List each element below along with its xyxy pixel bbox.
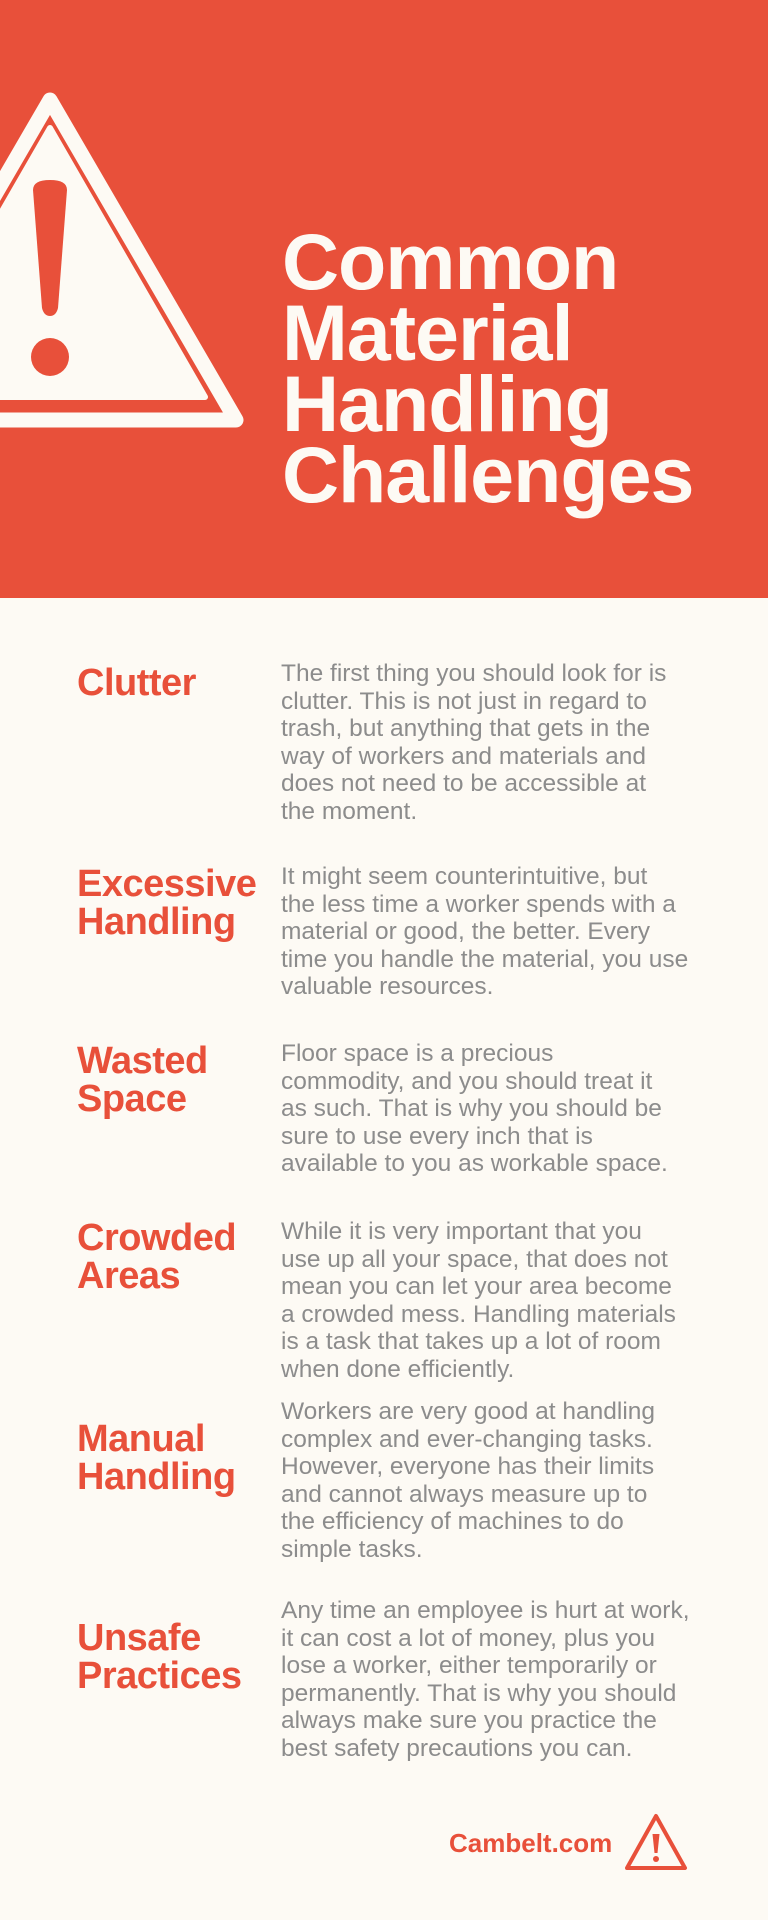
text: Clutter: The first thing you should look for is <box>281 660 666 687</box>
heading: Unsafe Practices: Practices <box>77 1655 242 1697</box>
heading: Wasted Space: Wasted <box>77 1040 208 1082</box>
text: Unsafe Practices: permanently. That is why you should <box>281 1680 676 1706</box>
text: Crowded Areas: mean you can let your area become <box>281 1273 672 1300</box>
heading: Clutter: Clutter <box>77 662 196 704</box>
text: Crowded Areas: a crowded mess. Handling materials <box>281 1300 676 1328</box>
text: Crowded Areas: use up all your space, that does not <box>281 1246 668 1272</box>
text: Unsafe Practices: always make sure you practice the <box>281 1707 657 1734</box>
icon: footer warning triangle <box>625 1814 688 1870</box>
text: Clutter: clutter. This is not just in regard to <box>281 688 647 714</box>
title <box>282 217 693 519</box>
header panel <box>0 0 768 598</box>
text: Crowded Areas <box>281 1218 676 1382</box>
text: Excessive Handling: material or good, the better. Every <box>281 918 650 945</box>
text: Excessive Handling <box>281 863 688 1000</box>
text: Crowded Areas: is a task that takes up a lot of room <box>281 1328 661 1355</box>
text: Unsafe Practices: lose a worker, either temporarily or <box>281 1652 657 1679</box>
title: Handling <box>282 359 612 448</box>
text: Excessive Handling: time you handle the material, you use <box>281 946 688 972</box>
heading: Excessive Handling: Handling <box>77 901 236 943</box>
title: Common <box>282 217 618 306</box>
text: Unsafe Practices: it can cost a lot of money, plus you <box>281 1624 655 1652</box>
text: Wasted Space: available to you as workable space. <box>281 1150 668 1177</box>
heading: Crowded Areas: Areas <box>77 1255 180 1297</box>
text: Unsafe Practices <box>281 1597 690 1762</box>
title: Challenges <box>282 430 693 519</box>
text: Manual Handling: Workers are very good at handling <box>281 1398 655 1425</box>
heading: Excessive Handling <box>77 863 256 943</box>
heading: Excessive Handling: Excessive <box>77 863 256 905</box>
text: Clutter <box>281 660 666 824</box>
title: Material <box>282 288 573 377</box>
text: Crowded Areas: While it is very important that you <box>281 1218 642 1245</box>
text: Clutter: way of workers and materials and <box>281 742 646 770</box>
heading: Manual Handling <box>77 1418 236 1498</box>
text: Manual Handling: simple tasks. <box>281 1536 423 1562</box>
text: Excessive Handling: valuable resources. <box>281 973 493 1000</box>
text: Manual Handling: However, everyone has their limits <box>281 1453 654 1480</box>
heading: Unsafe Practices <box>77 1617 242 1697</box>
text: Unsafe Practices: best safety precautions you can. <box>281 1734 632 1762</box>
heading: Crowded Areas <box>77 1217 236 1297</box>
text: Excessive Handling: It might seem counterintuitive, but <box>281 863 647 890</box>
heading: Crowded Areas: Crowded <box>77 1217 236 1259</box>
heading: Wasted Space: Space <box>77 1078 186 1120</box>
footer brand: Cambelt.com <box>449 1828 612 1858</box>
text: Manual Handling <box>281 1398 655 1562</box>
text: Unsafe Practices: Any time an employee is hurt at work, <box>281 1597 690 1624</box>
text: Clutter: the moment. <box>281 798 417 824</box>
text: Wasted Space: commodity, and you should treat it <box>281 1068 652 1094</box>
text: Wasted Space: Floor space is a precious <box>281 1040 553 1067</box>
text: Wasted Space: as such. That is why you should be <box>281 1095 662 1122</box>
heading: Manual Handling: Handling <box>77 1456 236 1498</box>
heading: Wasted Space <box>77 1040 208 1120</box>
text: Manual Handling: the efficiency of machines to do <box>281 1508 624 1535</box>
text: Crowded Areas: when done efficiently. <box>281 1356 514 1382</box>
heading: Unsafe Practices: Unsafe <box>77 1617 201 1659</box>
text: Excessive Handling: the less time a worker spends with a <box>281 890 676 918</box>
text: Manual Handling: and cannot always measure up to <box>281 1480 647 1508</box>
text: Manual Handling: complex and ever-changing tasks. <box>281 1426 653 1452</box>
text: Clutter: trash, but anything that gets in the <box>281 715 650 742</box>
text: Clutter: does not need to be accessible at <box>281 770 646 797</box>
text: Wasted Space: sure to use every inch that is <box>281 1122 593 1150</box>
heading: Manual Handling: Manual <box>77 1418 205 1460</box>
text: Wasted Space <box>281 1040 668 1177</box>
icon: warning triangle <box>0 92 244 428</box>
